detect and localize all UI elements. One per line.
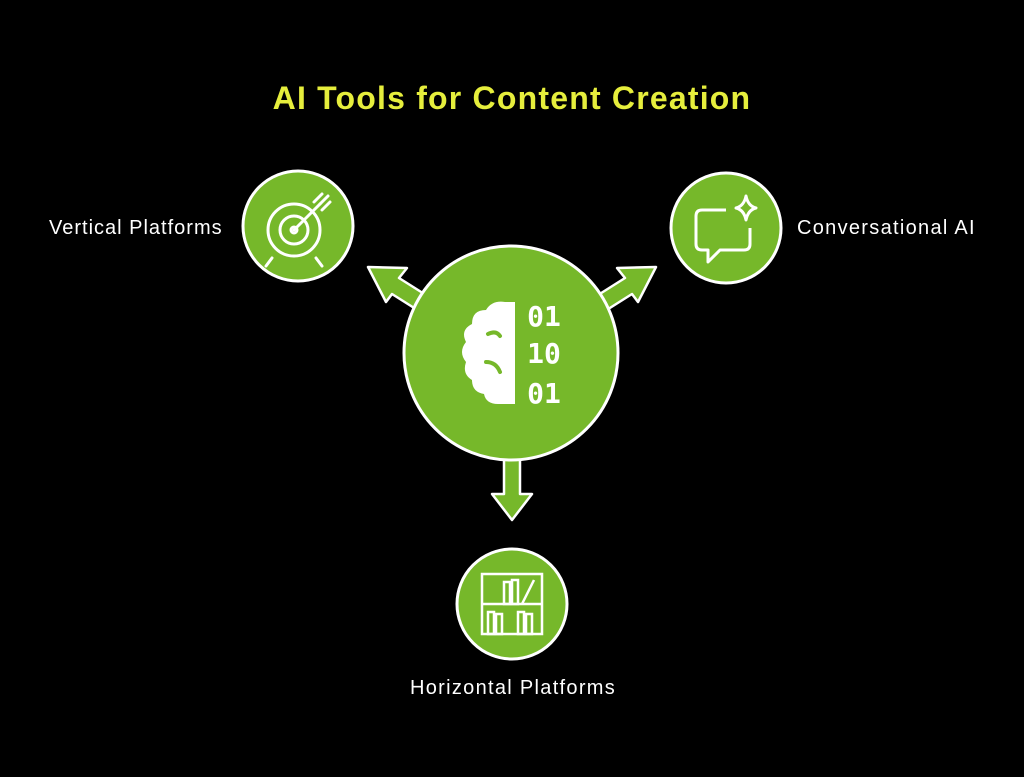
title: AI Tools for Content Creation (273, 80, 751, 116)
arrow: left (368, 267, 437, 318)
label: conversational AI: Conversational AI (797, 217, 976, 239)
icon: brain binary (462, 300, 561, 410)
circle: vertical platforms (target icon) (243, 171, 353, 281)
arrow: down (492, 455, 532, 520)
icon: brain binary: 01 (527, 300, 561, 333)
center circle (404, 246, 618, 460)
circle: horizontal platforms (shelf icon) (457, 549, 567, 659)
label: horizontal platforms: Horizontal Platforms (410, 677, 616, 699)
circle: conversational AI (chat icon) (671, 173, 781, 283)
icon: brain binary: 10 (527, 337, 561, 370)
arrow: right (587, 267, 656, 318)
icon: brain binary: 01 (527, 377, 561, 410)
label: vertical platforms: Vertical Platforms (49, 217, 223, 239)
